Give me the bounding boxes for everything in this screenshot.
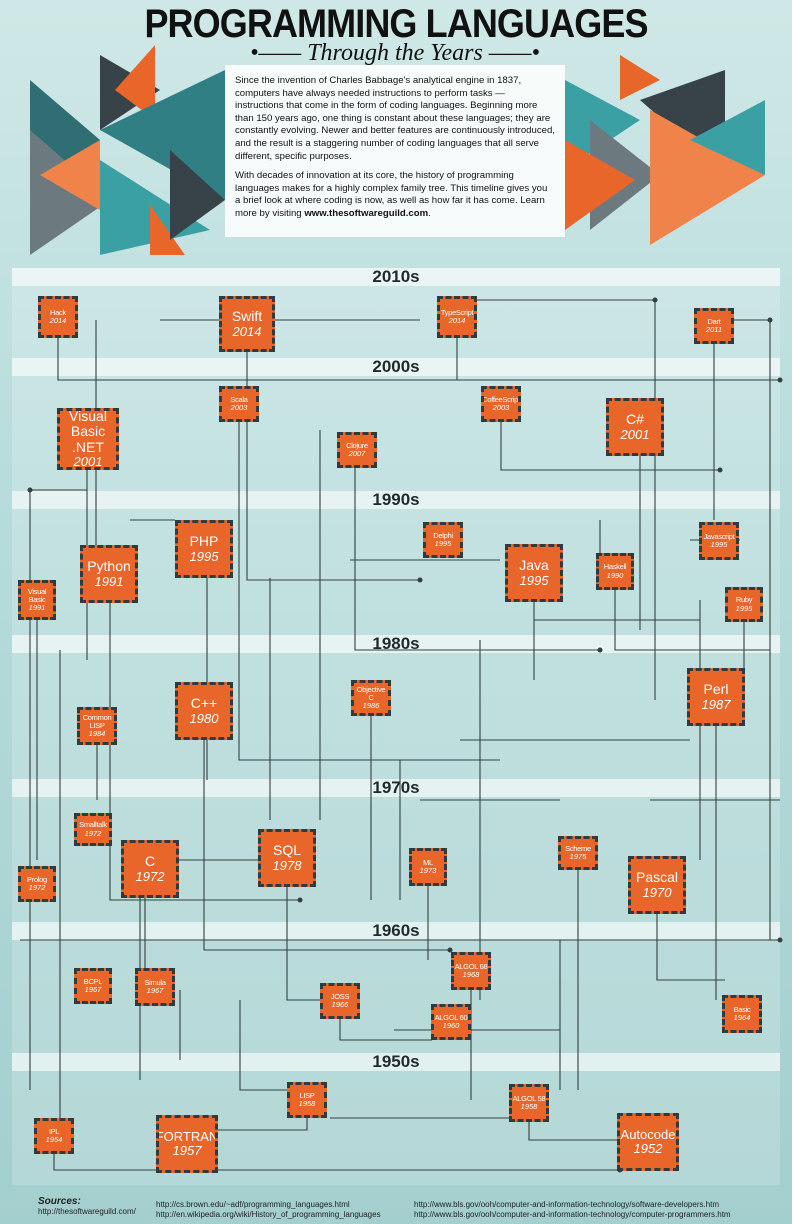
text: 2014 bbox=[233, 324, 261, 339]
text: http://en.wikipedia.org/wiki/History_of_programming_languages bbox=[156, 1210, 381, 1219]
text: http://www.bls.gov/ooh/computer-and-information-technology/software-developers.htm bbox=[414, 1200, 719, 1209]
sources footer bbox=[38, 1196, 731, 1219]
text: C bbox=[145, 853, 155, 869]
text: 1995 bbox=[736, 604, 752, 612]
text: ALGOL 60 bbox=[435, 1013, 467, 1022]
decade bands: 2010s bbox=[372, 267, 420, 286]
text: 1995 bbox=[711, 540, 727, 549]
text: 1975 bbox=[570, 852, 586, 861]
text: Autocode bbox=[621, 1127, 675, 1142]
text: 1958 bbox=[299, 1099, 315, 1108]
text: 1970s bbox=[372, 778, 420, 797]
text: 1960 bbox=[443, 1021, 459, 1030]
text: 2007 bbox=[349, 449, 365, 458]
text: CoffeeScript bbox=[482, 395, 520, 404]
text: Common LISP bbox=[83, 713, 111, 730]
text: 2001 bbox=[74, 454, 102, 469]
text: Swift bbox=[232, 308, 262, 324]
text: 1950s bbox=[372, 1052, 420, 1071]
text: Prolog bbox=[27, 875, 47, 884]
text: 1970 bbox=[643, 885, 671, 900]
text: Ruby bbox=[736, 595, 752, 604]
text: ALGOL 68 bbox=[455, 962, 487, 971]
text: 1954 bbox=[46, 1135, 62, 1144]
text: http://www.bls.gov/ooh/computer-and-information-technology/computer-programmers.htm bbox=[414, 1210, 731, 1219]
text: 1966 bbox=[332, 1000, 348, 1009]
text: 2003 bbox=[493, 403, 509, 412]
text: FORTRAN bbox=[156, 1129, 218, 1144]
text: 1952 bbox=[634, 1141, 662, 1156]
subtitle: •—— Through the Years ——• bbox=[250, 40, 540, 66]
text: http://thesoftwareguild.com/ bbox=[38, 1207, 136, 1216]
text: 1967 bbox=[85, 985, 101, 994]
text: Scala bbox=[230, 395, 248, 404]
text: Java bbox=[519, 557, 549, 573]
text: Python bbox=[87, 558, 131, 574]
text: Delphi bbox=[433, 531, 453, 540]
header triangles bbox=[30, 45, 765, 255]
text: C# bbox=[626, 411, 644, 427]
text: 1991 bbox=[95, 574, 123, 589]
text: Haskell bbox=[604, 562, 626, 571]
text: 1957 bbox=[173, 1143, 201, 1158]
text: BCPL bbox=[84, 977, 102, 986]
text: Perl bbox=[704, 681, 728, 697]
text: 1973 bbox=[420, 866, 436, 875]
text: 1964 bbox=[734, 1013, 750, 1022]
text: ALGOL 58 bbox=[513, 1094, 545, 1103]
text: C++ bbox=[191, 695, 217, 711]
chips: 2014 bbox=[50, 316, 66, 325]
text: 1980 bbox=[190, 711, 218, 726]
text: 2014 bbox=[449, 316, 465, 325]
text: 2000s bbox=[372, 357, 420, 376]
text: 1987 bbox=[702, 697, 730, 712]
text: Sources: bbox=[38, 1196, 81, 1207]
chips: Hack bbox=[50, 308, 66, 317]
text: 2001 bbox=[621, 427, 649, 442]
text: Visual Basic .NET bbox=[69, 408, 107, 455]
text: 1991 bbox=[29, 603, 45, 612]
text: IPL bbox=[49, 1127, 59, 1136]
chips bbox=[38, 296, 78, 338]
text: PHP bbox=[190, 533, 218, 549]
text: Scheme bbox=[565, 844, 591, 853]
title: PROGRAMMING LANGUAGES bbox=[144, 2, 648, 46]
text: 1960s bbox=[372, 921, 420, 940]
text: 2003 bbox=[231, 403, 247, 412]
decade bands bbox=[12, 268, 780, 286]
text: Visual Basic bbox=[28, 587, 46, 604]
text: 1980s bbox=[372, 634, 420, 653]
text: 1995 bbox=[520, 573, 548, 588]
text: 1990s bbox=[372, 490, 420, 509]
text: 1995 bbox=[435, 539, 451, 548]
text: 2011 bbox=[706, 325, 722, 334]
text: Smalltalk bbox=[79, 820, 107, 829]
text: 1986 bbox=[363, 701, 379, 710]
intro text panel: Since the invention of Charles Babbage's analytical engine in 1837, computers have always needed instructions to perform tasks — instructions that come in the form of coding languages. Beginning more than 150 years ago, one thing is constant about these languages; they are constantly evolving. Newer and better features are continuously introduced, and the result is a staggering number of coding languages that all serve different, specific purposes. bbox=[235, 75, 555, 162]
text: 1968 bbox=[463, 970, 479, 979]
text: LISP bbox=[299, 1091, 315, 1100]
text: Clojure bbox=[346, 441, 368, 450]
text: Pascal bbox=[636, 869, 678, 885]
text: 1978 bbox=[273, 858, 301, 873]
text: Objective C bbox=[357, 685, 385, 702]
text: 1990 bbox=[607, 570, 623, 580]
text: 1984 bbox=[89, 729, 105, 738]
intro text panel bbox=[225, 65, 565, 237]
text: TypeScript bbox=[441, 308, 473, 317]
text: 1972 bbox=[136, 869, 164, 884]
text: Dart bbox=[708, 317, 720, 326]
text: JOSS bbox=[331, 992, 349, 1001]
text: http://cs.brown.edu/~adf/programming_languages.html bbox=[156, 1200, 350, 1209]
text: 1995 bbox=[190, 549, 218, 564]
text: 1958 bbox=[521, 1102, 537, 1111]
timeline panel bbox=[12, 268, 780, 1185]
text: Basic bbox=[734, 1005, 750, 1014]
text: Simula bbox=[144, 978, 166, 987]
text: 1972 bbox=[85, 828, 101, 838]
text: ML bbox=[423, 858, 433, 867]
text: Javascript bbox=[704, 532, 734, 541]
text: SQL bbox=[273, 842, 301, 858]
text: 1967 bbox=[147, 986, 163, 995]
text: 1972 bbox=[29, 883, 45, 892]
intro text panel: With decades of innovation at its core, the history of programming languages makes for a highly complex family tree. This timeline gives you a brief look at where coding is now, as well as how far it has come. Learn more by visiting www.thesoftwareguild.com. bbox=[235, 170, 547, 219]
